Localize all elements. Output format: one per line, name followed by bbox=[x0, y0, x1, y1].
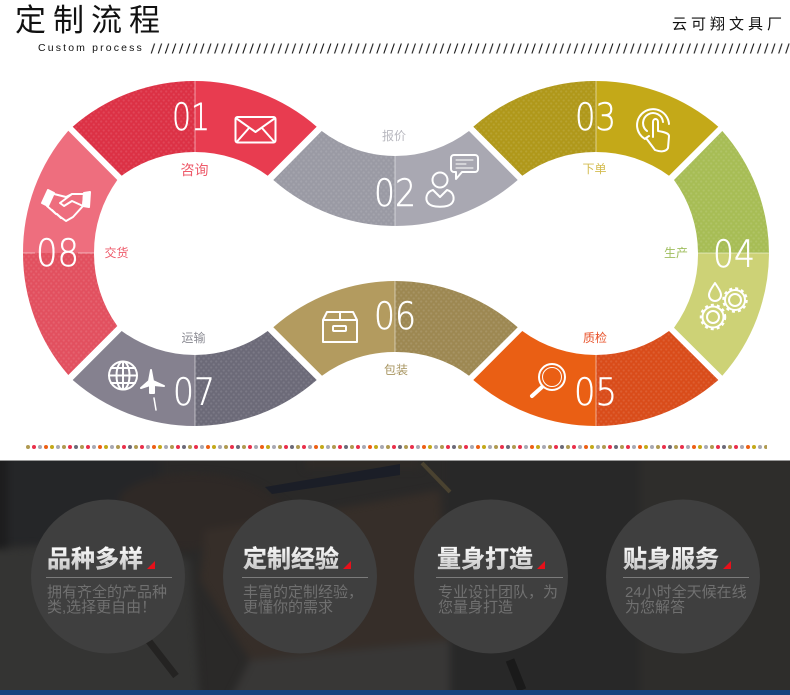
segment 06 packaging: 06 bbox=[374, 295, 416, 338]
card: variety: 拥有齐全的产品种 bbox=[47, 583, 167, 601]
segment 01 consult: 01 bbox=[172, 96, 210, 139]
card: tailored: 您量身打造 bbox=[438, 599, 513, 616]
label: quote: 报价 bbox=[382, 128, 406, 143]
segment 03 order bbox=[473, 81, 718, 176]
card: experience bbox=[223, 500, 377, 654]
icon: envelope bbox=[236, 117, 276, 142]
label: inspection: 质检 bbox=[583, 330, 607, 345]
label: packaging: 包装 bbox=[384, 363, 408, 377]
card: variety: 品种多样 bbox=[47, 546, 143, 573]
slash rule bbox=[150, 43, 790, 54]
label: consult: 咨询 bbox=[180, 162, 208, 178]
card: service: 为您解答 bbox=[625, 599, 685, 616]
card: experience: 更懂你的需求 bbox=[243, 599, 333, 616]
card: experience: 定制经验 bbox=[243, 545, 339, 573]
label: shipping: 运输 bbox=[181, 330, 206, 345]
segment 07 shipping bbox=[73, 331, 317, 426]
card: tailored bbox=[414, 500, 568, 654]
card: tailored: 专业设计团队，为 bbox=[438, 584, 558, 601]
card: variety: 类,选择更自由！ bbox=[47, 599, 156, 616]
icon: tapping hand bbox=[637, 109, 669, 151]
card: tailored: 量身打造 bbox=[437, 546, 533, 573]
segment 08 delivery: 08 bbox=[36, 232, 79, 275]
label: order: 下单 bbox=[582, 162, 607, 176]
card: service bbox=[606, 500, 760, 654]
card: experience: 丰富的定制经验， bbox=[243, 583, 363, 601]
label: delivery: 交货 bbox=[104, 245, 129, 260]
icon: handshake bbox=[42, 190, 90, 221]
panel: dark photo band bbox=[0, 455, 790, 695]
segment 05 inspection: 05 bbox=[574, 371, 617, 414]
segment 03 order: 03 bbox=[575, 96, 616, 139]
icon: globe and plane bbox=[109, 362, 164, 410]
segment 08 delivery bbox=[23, 131, 117, 375]
company name: 云可翔文具厂 bbox=[672, 16, 786, 33]
segment 06 packaging bbox=[273, 281, 518, 376]
icon: box bbox=[323, 312, 357, 342]
segment 01 consult bbox=[73, 81, 317, 176]
icon: magnifier bbox=[532, 364, 565, 396]
segment 04 production: 04 bbox=[713, 233, 755, 276]
card: service: 贴身服务 bbox=[623, 546, 719, 573]
segment 04 production bbox=[674, 131, 769, 376]
segment 07 shipping: 07 bbox=[173, 371, 215, 414]
card: service: 24小时全天候在线 bbox=[625, 583, 747, 601]
card: variety bbox=[31, 500, 185, 654]
segment 02 quote: 02 bbox=[374, 172, 416, 215]
label: production: 生产 bbox=[664, 246, 688, 260]
icon: person with speech bubble bbox=[426, 155, 478, 207]
subtitle: Custom process: Custom process bbox=[38, 42, 144, 54]
dotted colour rule bbox=[25, 443, 767, 451]
title: 定制流程 bbox=[15, 3, 167, 38]
segment 02 quote bbox=[273, 131, 518, 226]
icon: drop and gears bbox=[701, 283, 746, 329]
segment 05 inspection bbox=[473, 331, 718, 426]
